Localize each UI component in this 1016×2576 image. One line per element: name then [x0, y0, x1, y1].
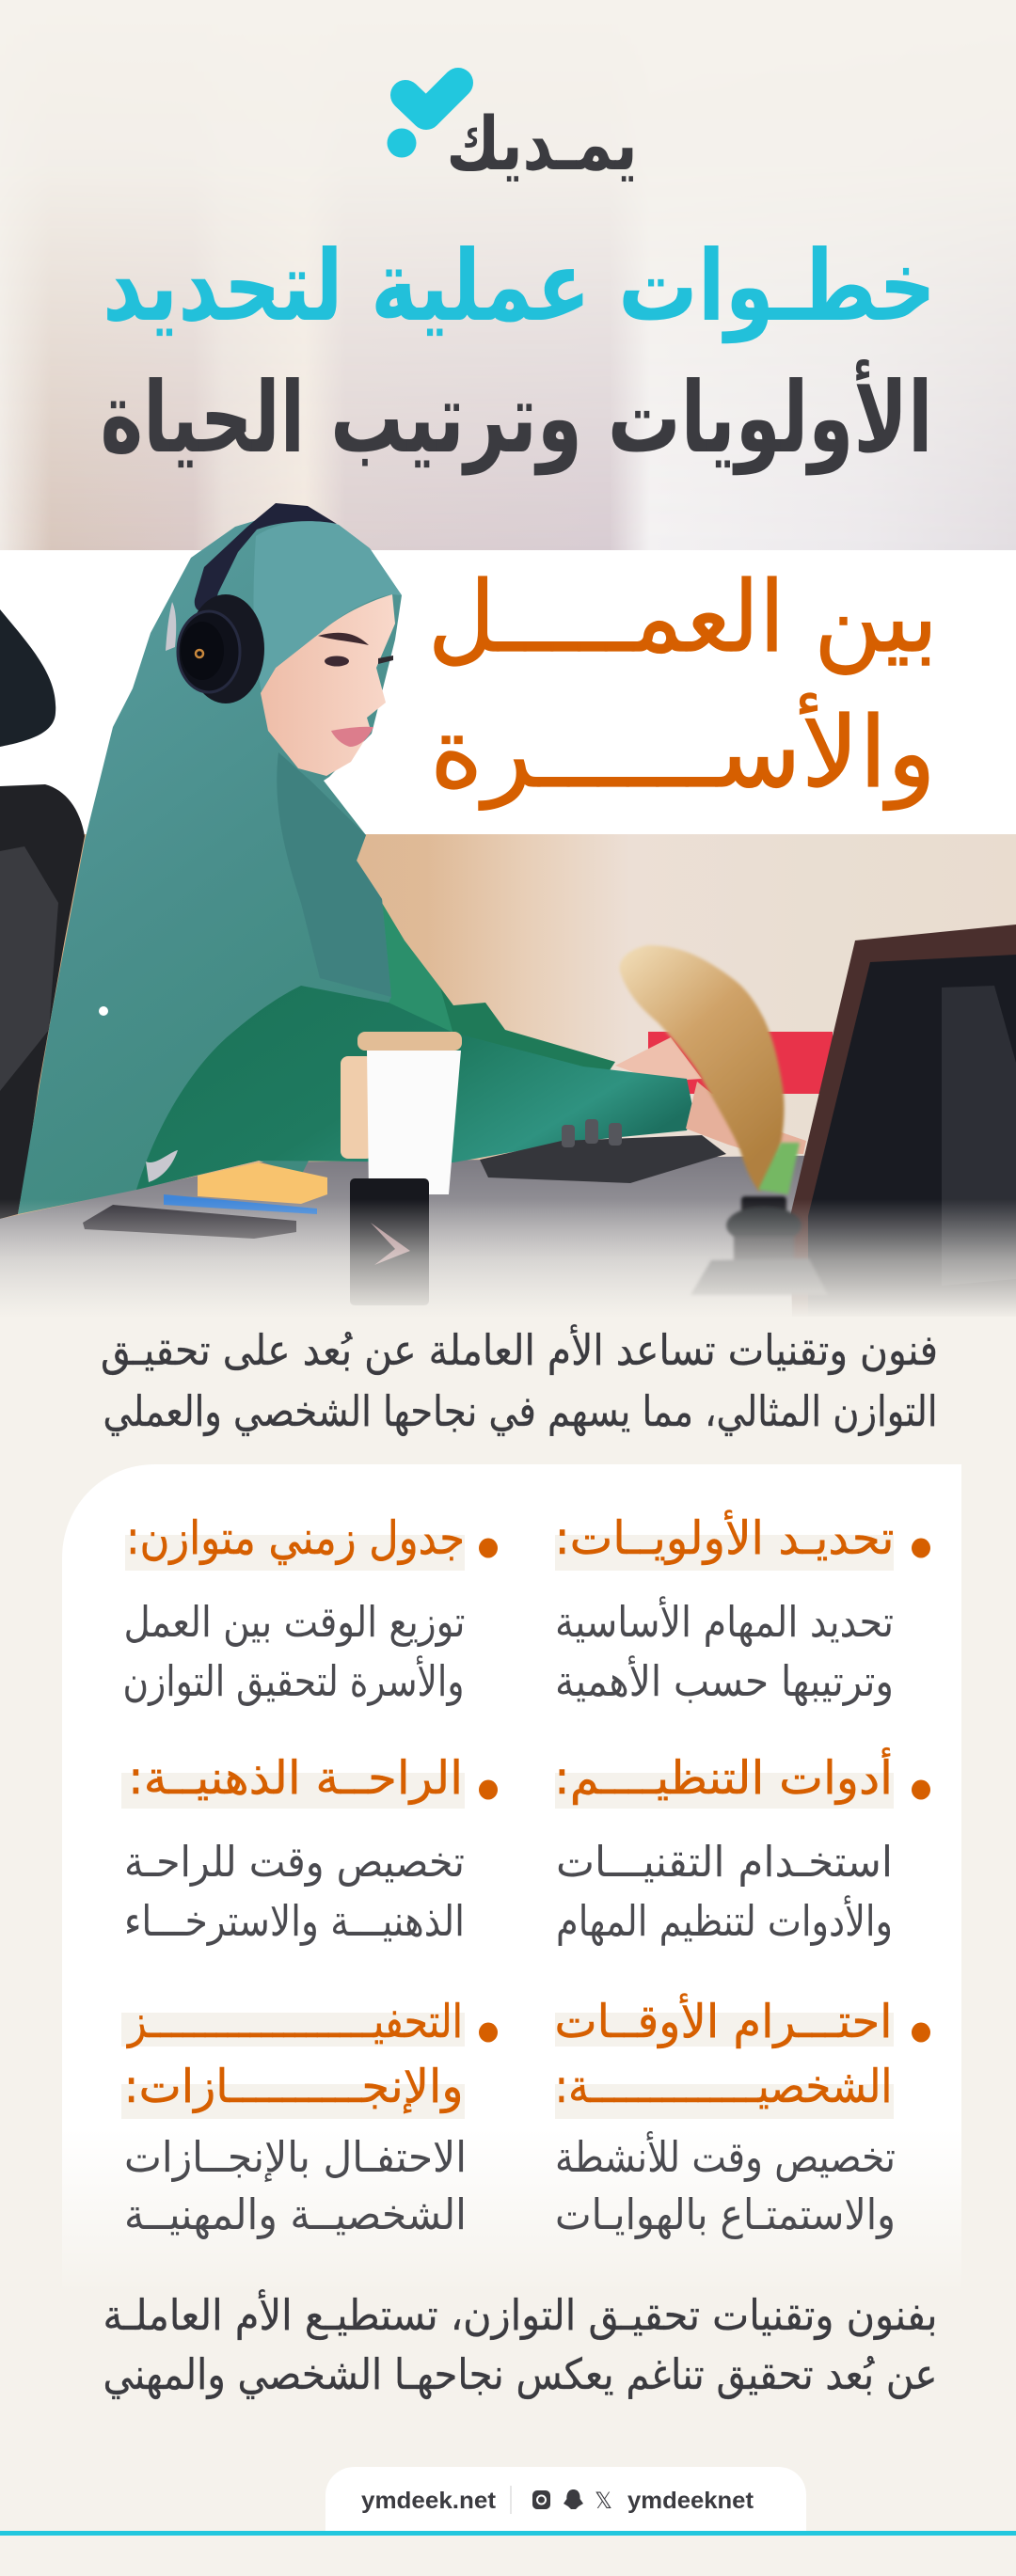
lips [331, 727, 373, 747]
subtitle line 2: والأســــــرة [430, 692, 936, 811]
hijab front edge [254, 521, 402, 691]
face [261, 594, 395, 776]
cup body [367, 1051, 461, 1194]
closing line 1: بفنون وتقنيات تحقيـق التوازن، تستطيـع الأم العاملـة [103, 2288, 937, 2341]
heading highlight [125, 1535, 465, 1571]
heading: جدول زمني متوازن: [126, 1511, 465, 1565]
title [100, 229, 936, 476]
photo: woman at desk [0, 503, 1016, 1317]
near hand [686, 1082, 806, 1154]
headphones [178, 503, 337, 703]
intro line 1: فنون وتقنيات تساعد الأم العاملة عن بُعد على تحقيـق [101, 1323, 938, 1376]
phone [83, 1205, 296, 1239]
description [124, 2132, 467, 2240]
near sleeve [136, 986, 693, 1190]
subtitle line 1: بين العمـــــل [428, 560, 938, 675]
description: وترتيبها حسب الأهمية [555, 1654, 894, 1707]
description: توزيع الوقت بين العمل [124, 1597, 465, 1647]
inner ear cup [178, 611, 240, 692]
headband [195, 503, 337, 612]
bullet [912, 1779, 930, 1800]
eye [325, 656, 349, 666]
heading [555, 1992, 892, 2113]
feather [620, 945, 785, 1192]
heading highlight [555, 1535, 894, 1571]
description: والأدوات لتنظيم المهام [556, 1894, 893, 1947]
heading: أدوات التنظيــــم: [554, 1747, 893, 1805]
description [122, 1597, 465, 1707]
description: والأسرة لتحقيق التوازن [122, 1654, 465, 1707]
chest dress fold [376, 893, 453, 1035]
footer pill [325, 2467, 806, 2532]
outer ear cup [187, 594, 264, 703]
hijab and body [18, 513, 402, 1214]
description: تحديد المهام الأساسية [555, 1595, 894, 1647]
far hand [615, 1037, 702, 1082]
heading: والإنجــــــــــازات: [124, 2060, 463, 2113]
panel: photo background [0, 833, 1016, 1317]
description [555, 1595, 894, 1707]
heading highlights [121, 2013, 465, 2119]
bullet [479, 1539, 498, 1557]
office chair [0, 609, 85, 1219]
description [555, 2130, 896, 2240]
heading [124, 1995, 463, 2113]
cup [341, 1032, 462, 1194]
heading highlight [121, 1773, 465, 1809]
far eye [378, 656, 393, 664]
keyboard knobs [562, 1119, 622, 1147]
description: الشخصيــة والمهنيــة [124, 2189, 467, 2240]
monitor stand [942, 986, 1016, 1286]
logo on cup [196, 650, 203, 657]
item: respecting personal time [555, 1992, 930, 2240]
bullet [479, 2022, 498, 2043]
intro text [101, 1323, 938, 1437]
description: تخصيص وقت للأنشطة [555, 2130, 896, 2183]
far sleeve [376, 988, 615, 1082]
eyebrow [318, 633, 369, 645]
icon: snapchat [564, 2489, 583, 2509]
sticky notes [198, 1162, 327, 1204]
logo [388, 83, 638, 187]
hijab embroidered spots [99, 602, 178, 1182]
item: setting priorities [555, 1509, 930, 1707]
social handle: ymdeeknet [627, 2488, 754, 2514]
plant [758, 1143, 800, 1194]
bullet [479, 1779, 498, 1800]
heading: الشخصيــــــــــــــة: [555, 2060, 892, 2113]
desk [0, 1153, 1016, 1317]
item: mental rest [121, 1751, 498, 1947]
footer bar [0, 2531, 1016, 2536]
description: تخصيص وقت للراحـة [124, 1837, 465, 1888]
heading: احتـــرام الأوقــات [555, 1992, 892, 2048]
pen [164, 1194, 317, 1214]
black box on desk [350, 1178, 429, 1305]
closing line 2: عن بُعد تحقيق تناغم يعكس نجاحهـا الشخصي والمهني [103, 2349, 937, 2400]
logo wordmark: يمـديك [446, 103, 638, 187]
closing text [103, 2288, 937, 2400]
item: motivation and achievements [121, 1995, 498, 2240]
panel: white card [62, 1464, 961, 2295]
panel: white subtitle band [0, 550, 1016, 834]
heading highlight [555, 1773, 894, 1809]
description: الذهنيـــة والاسترخـــاء [124, 1896, 465, 1947]
item: organizing tools [554, 1747, 930, 1947]
icon: logo check mark [405, 83, 458, 115]
cup lid [357, 1032, 462, 1051]
red book [648, 1032, 833, 1094]
face plate [181, 622, 224, 680]
icon: logo dot [388, 128, 416, 158]
heading: تحديـد الأولويــات: [555, 1509, 894, 1565]
bullet [912, 2022, 930, 2043]
item: balanced schedule [122, 1511, 498, 1707]
cup handle [341, 1056, 373, 1159]
description: والاستمتـاع بالهوايـات [555, 2189, 896, 2240]
description [124, 1837, 465, 1947]
heading: الراحــة الذهنيــة: [128, 1751, 463, 1805]
keyboard [480, 1135, 726, 1183]
description [556, 1837, 893, 1947]
icon: X: 𝕏 [595, 2488, 612, 2514]
description: استخـدام التقنيـــات [556, 1837, 893, 1887]
header background with soft stripes [0, 208, 1016, 550]
hijab folds [277, 752, 391, 997]
ink bottle [691, 1196, 828, 1295]
heading: التحفيــــــــــــــــــــز [126, 1995, 463, 2048]
subtitle [428, 560, 938, 811]
icon: instagram [532, 2490, 550, 2509]
description: الاحتفـال بالإنجــازات [124, 2132, 467, 2182]
photo bottom fade [0, 1199, 1016, 1320]
bullet [912, 1539, 930, 1557]
monitor [790, 925, 1016, 1317]
website: ymdeek.net [361, 2488, 497, 2514]
heading highlights [555, 2013, 894, 2119]
